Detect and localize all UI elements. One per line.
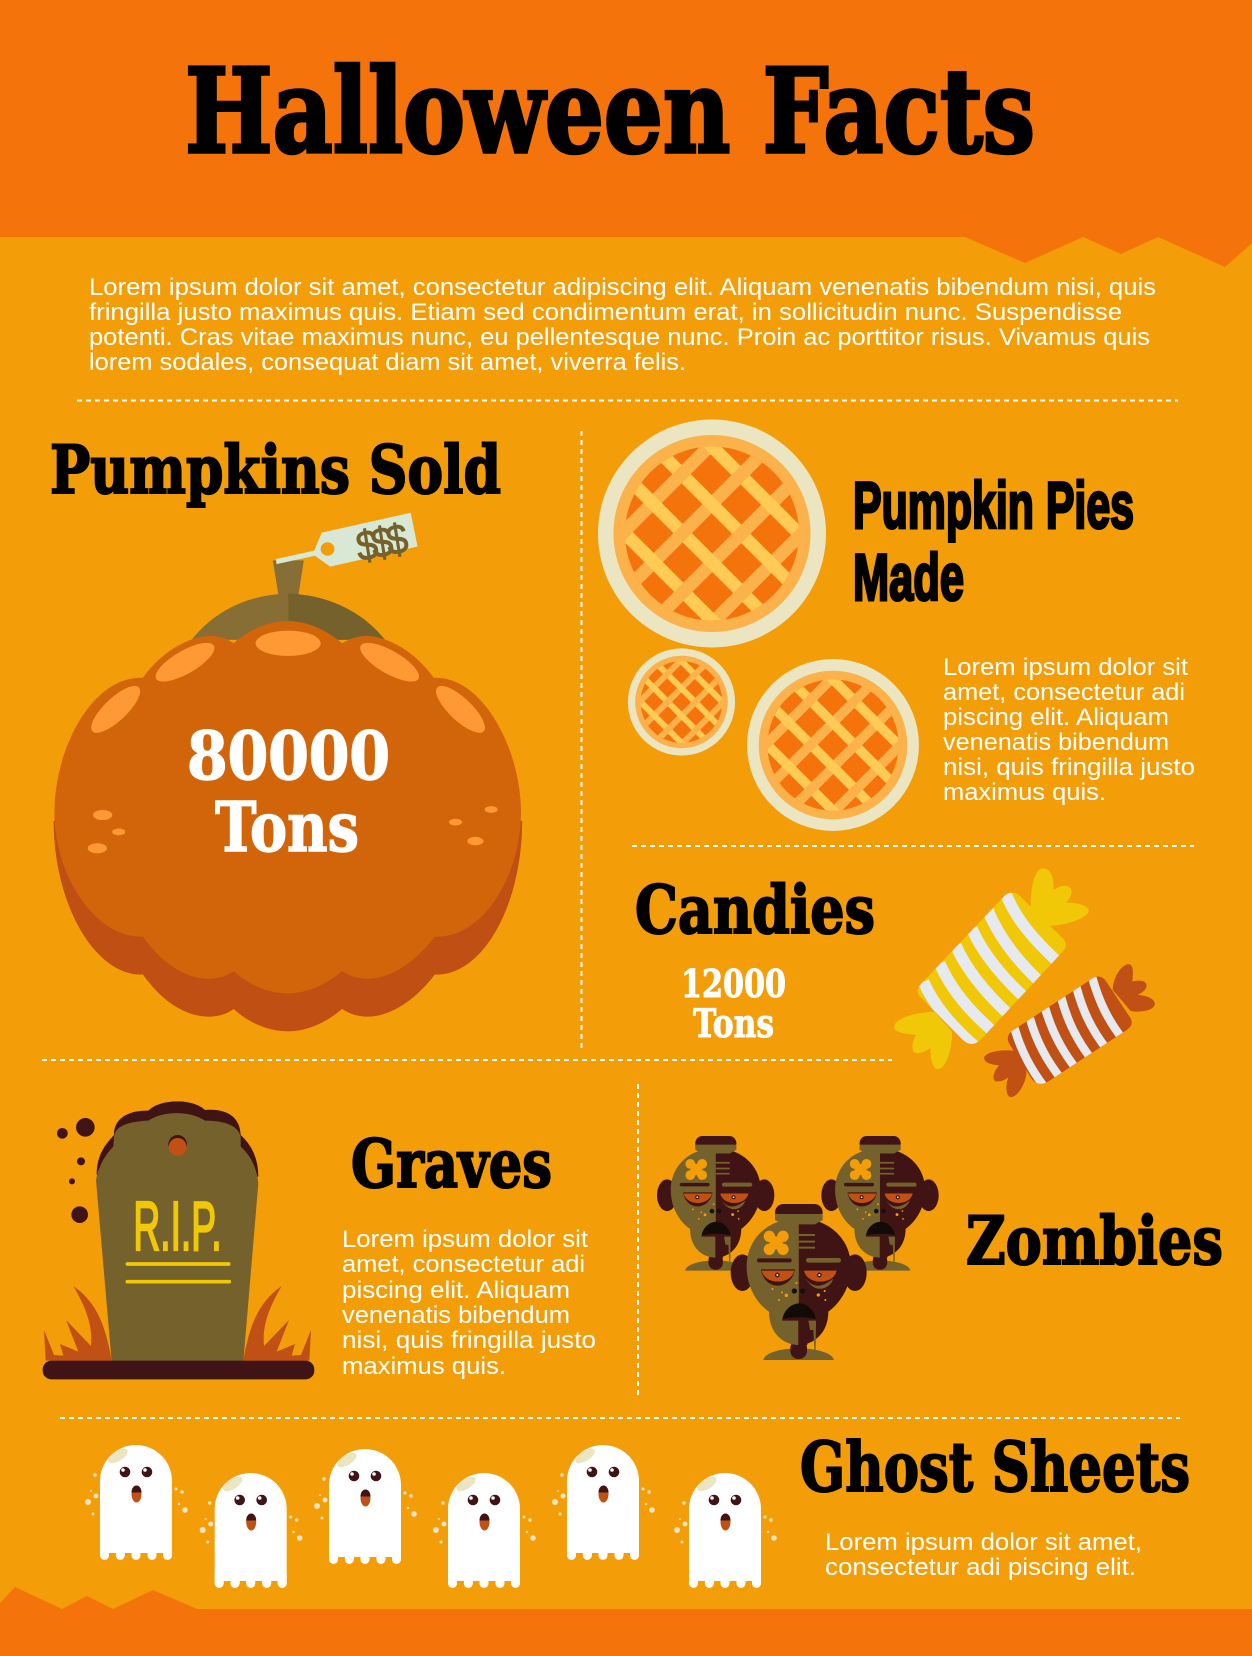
top banner with jagged edge — [0, 0, 1252, 267]
heading: pumpkin pies made — [853, 468, 1134, 614]
heading: pumpkin pies made: Made — [853, 540, 964, 614]
icon: candies — [894, 868, 1155, 1097]
text: graves description: piscing elit. Aliquam — [342, 1277, 570, 1304]
text: pies description: amet, consectetur adi — [943, 679, 1185, 706]
panel: pumpkins sold — [50, 431, 522, 1031]
icon: pumpkin with price tag: $$$ — [353, 515, 411, 571]
panel: ghost sheets — [85, 1428, 1190, 1588]
panel: candies — [635, 868, 1155, 1097]
panel: graves — [43, 1101, 596, 1380]
text: ghost description: Lorem ipsum dolor sit amet, — [825, 1529, 1142, 1556]
icon: pumpkin with price tag — [54, 513, 522, 1031]
intro text: potenti. Cras vitae maximus nunc, eu pellentesque nunc. Proin ac porttitor risus. Vivamus quis — [89, 324, 1150, 351]
icon: large pie — [578, 399, 846, 668]
icon: small pie — [618, 639, 745, 765]
panel: pumpkin pies made — [578, 399, 1195, 846]
heading: candies: Candies — [635, 871, 875, 949]
text: ghost description: consectetur adi piscing elit. — [825, 1554, 1136, 1581]
text: graves description: amet, consectetur adi — [342, 1251, 585, 1278]
intro text: fringilla justo maximus quis. Etiam sed condimentum erat, in sollicitudin nunc. Suspendisse — [89, 299, 1122, 326]
bottom banner with jagged edge — [0, 1587, 1252, 1656]
intro text — [89, 274, 1156, 376]
pumpkin figure: Tons — [215, 788, 359, 868]
text: pies description: nisi, quis fringilla justo — [943, 754, 1195, 781]
text: ghost description — [825, 1529, 1142, 1581]
pumpkin figure: 80000 — [187, 717, 390, 795]
text: graves description — [342, 1226, 596, 1380]
intro text: Lorem ipsum dolor sit amet, consectetur adipiscing elit. Aliquam venenatis bibendum nisi, quis — [89, 274, 1156, 301]
icon: gravestone — [43, 1101, 314, 1379]
text: pies description: Lorem ipsum dolor sit — [943, 654, 1188, 681]
icon: gravestone: R.I.P. — [133, 1187, 222, 1265]
candies figure: Tons — [693, 1001, 774, 1047]
text: graves description: venenatis bibendum — [342, 1302, 570, 1329]
panel: zombies — [657, 1136, 1223, 1360]
title: Halloween Facts — [185, 44, 1035, 180]
intro text: lorem sodales, consequat diam sit amet, viverra felis. — [89, 349, 686, 376]
text: graves description: nisi, quis fringilla justo — [342, 1327, 596, 1354]
pumpkin figure — [187, 717, 390, 868]
text: pies description — [943, 654, 1195, 806]
heading: graves: Graves — [351, 1125, 552, 1203]
heading: pumpkins sold: Pumpkins Sold — [50, 431, 501, 509]
text: graves description: maximus quis. — [342, 1353, 506, 1380]
text: pies description: piscing elit. Aliquam — [943, 704, 1169, 731]
icon: zombie heads — [657, 1136, 939, 1360]
text: graves description: Lorem ipsum dolor sit — [342, 1226, 588, 1253]
candies figure — [681, 961, 786, 1047]
candies figure: 12000 — [681, 961, 786, 1006]
text: pies description: venenatis bibendum — [943, 729, 1169, 756]
text: pies description: maximus quis. — [943, 779, 1106, 806]
icon: ghosts row — [85, 1445, 777, 1588]
icon: medium pie — [732, 644, 934, 846]
